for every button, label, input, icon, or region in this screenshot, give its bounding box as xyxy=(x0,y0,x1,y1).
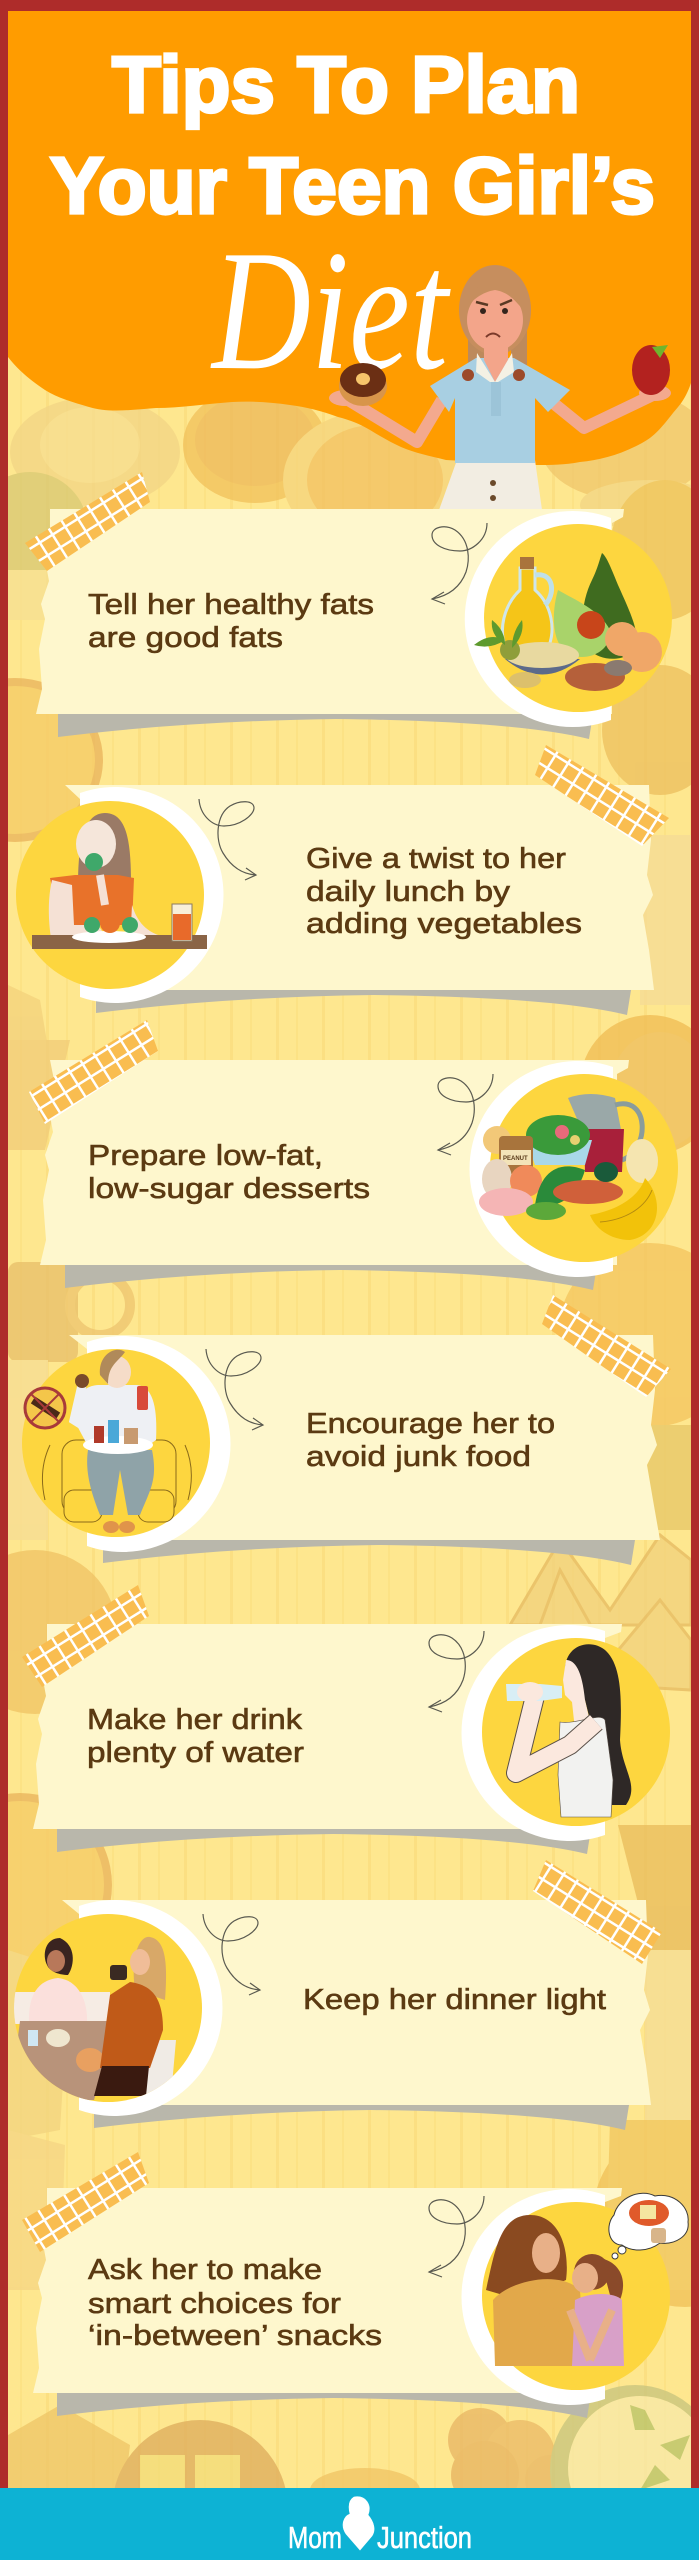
text xyxy=(88,1140,370,1205)
icon: mother and daughter talking about snacks xyxy=(486,2193,688,2366)
text: daily lunch by xyxy=(306,876,511,908)
text: smart choices for xyxy=(88,2288,341,2320)
tape: top left xyxy=(29,1020,158,1124)
title: Tips To Plan xyxy=(112,40,580,129)
icon: woman eating junk food on armchair xyxy=(25,1350,191,1533)
panel: low-fat desserts xyxy=(29,1020,678,1290)
title: Your Teen Girl’s xyxy=(50,141,655,230)
panel: healthy fats xyxy=(25,472,672,739)
text: Encourage her to xyxy=(306,1408,555,1440)
text xyxy=(88,589,374,654)
tape: top right xyxy=(535,745,669,846)
icon: woman eating vegetables xyxy=(32,813,207,949)
logo: MomJunction: Mom xyxy=(288,2520,342,2555)
arrow xyxy=(429,1631,484,1712)
tape: top left xyxy=(22,1585,149,1687)
panel: vegetables at lunch xyxy=(16,745,669,1015)
thought bubble xyxy=(609,2193,688,2259)
title: Diet xyxy=(210,216,451,406)
text: plenty of water xyxy=(87,1737,304,1769)
text: Make her drink xyxy=(87,1704,303,1736)
text: adding vegetables xyxy=(306,908,582,940)
arrow xyxy=(206,1349,263,1430)
arrow xyxy=(203,1914,260,1995)
text: low-sugar desserts xyxy=(88,1173,370,1205)
arrow xyxy=(438,1074,493,1155)
text: Ask her to make xyxy=(88,2254,322,2286)
arrow xyxy=(432,523,487,604)
header orange wave xyxy=(8,11,691,465)
text: Give a twist to her xyxy=(306,843,566,875)
arrow xyxy=(429,2196,484,2277)
text: avoid junk food xyxy=(306,1441,531,1473)
logo: MomJunction xyxy=(288,2497,472,2555)
text: Tell her healthy fats xyxy=(88,589,374,621)
footer bar xyxy=(0,2488,699,2560)
title xyxy=(50,40,655,406)
logo: MomJunction: Junction xyxy=(377,2520,472,2555)
tape: top left xyxy=(25,472,150,571)
panel: light dinner xyxy=(10,1860,662,2130)
icon: teen girl with donut and apple xyxy=(329,265,671,510)
text: Keep her dinner light xyxy=(303,1984,606,2016)
icon: girl drinking water xyxy=(506,1644,631,1817)
tape: top left xyxy=(22,2152,149,2252)
panel: drink water xyxy=(22,1585,670,1854)
arrow xyxy=(199,799,256,880)
text xyxy=(88,2254,382,2352)
text xyxy=(87,1704,304,1769)
icon: oil, avocado, nuts and eggs xyxy=(474,553,662,691)
icon: two women having dinner xyxy=(10,1937,176,2100)
icon: healthy dessert ingredients xyxy=(479,1094,658,1240)
tape: top right xyxy=(533,1860,662,1964)
text xyxy=(306,1408,555,1473)
text: Prepare low-fat, xyxy=(88,1140,323,1172)
panel: avoid junk food xyxy=(22,1295,671,1565)
icon: no junk food sign xyxy=(25,1388,65,1428)
tape: top right xyxy=(542,1295,671,1397)
panel: smart snack choices xyxy=(22,2152,688,2418)
text: ‘in-between’ snacks xyxy=(88,2320,382,2352)
text: are good fats xyxy=(88,622,283,654)
icon: healthy dessert ingredients: PEANUT xyxy=(503,1156,528,1162)
text xyxy=(306,843,582,940)
